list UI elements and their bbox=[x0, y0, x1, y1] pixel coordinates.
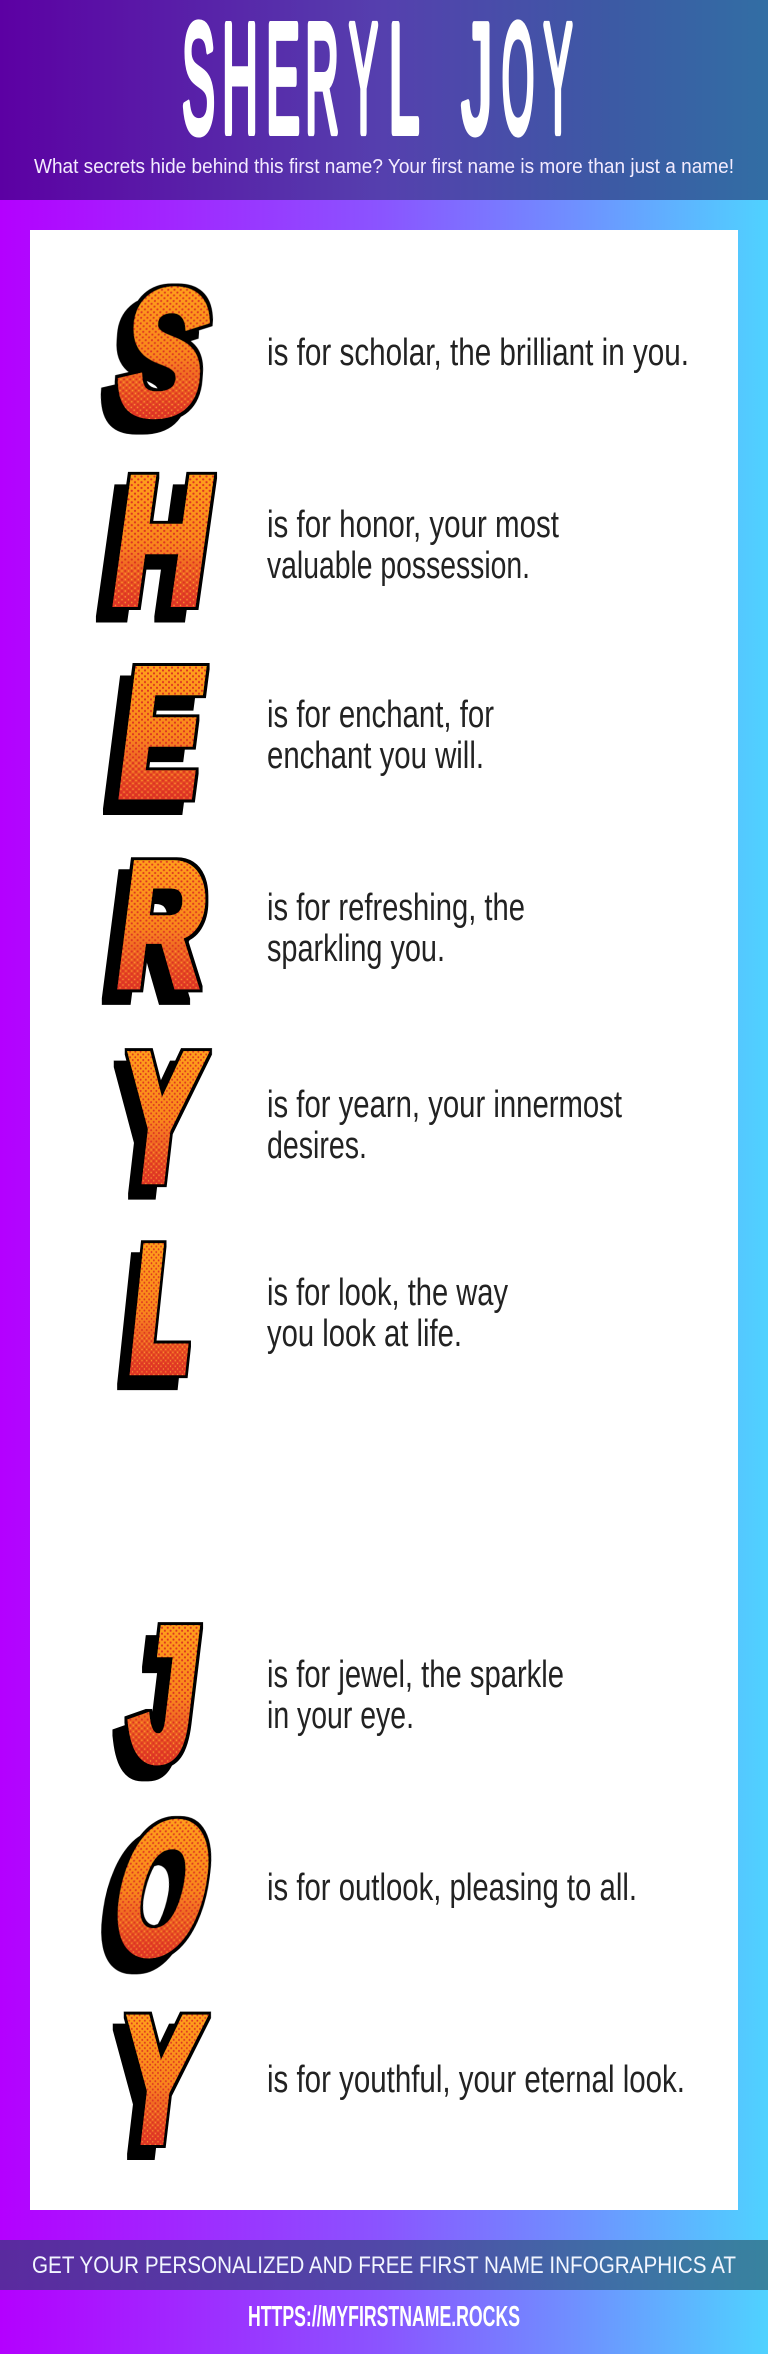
row: R bbox=[119, 826, 525, 1023]
row: H bbox=[114, 441, 559, 641]
row: Y second bbox=[123, 1984, 685, 2176]
text: jewel: is for jewel, the sparkle bbox=[267, 1654, 564, 1696]
icon: comic letter R: R bbox=[119, 826, 203, 1023]
header background bbox=[0, 0, 768, 200]
icon: comic letter O: O bbox=[104, 1786, 218, 1992]
text: yearn bbox=[267, 1084, 622, 1167]
text: enchant: is for enchant, for bbox=[267, 694, 494, 736]
row: O bbox=[104, 1786, 637, 1992]
row: Y bbox=[124, 1019, 622, 1216]
text: refreshing bbox=[267, 887, 525, 970]
icon: comic letter Y: Y bbox=[123, 1984, 201, 2176]
text: look: is for look, the way bbox=[267, 1272, 508, 1314]
text: honor: is for honor, your most bbox=[267, 504, 559, 546]
text: honor bbox=[267, 504, 559, 587]
text: look: you look at life. bbox=[267, 1313, 462, 1355]
text: jewel bbox=[267, 1654, 564, 1737]
icon: comic letter J: J bbox=[130, 1591, 196, 1798]
text: enchant bbox=[267, 694, 494, 777]
title: SHERYL JOY bbox=[182, 0, 573, 166]
text: enchant: enchant you will. bbox=[267, 735, 484, 777]
icon: comic letter E: E bbox=[120, 631, 204, 834]
text: refreshing: is for refreshing, the bbox=[267, 887, 525, 929]
text: refreshing: sparkling you. bbox=[267, 928, 445, 970]
icon: comic letter S: S bbox=[114, 256, 213, 451]
icon: comic letter H: H bbox=[114, 441, 210, 641]
row: S bbox=[114, 256, 689, 451]
text: outlook: is for outlook, pleasing to all. bbox=[267, 1867, 637, 1909]
row: J bbox=[130, 1591, 564, 1798]
icon: comic letter Y: Y bbox=[124, 1019, 202, 1216]
footer url: HTTPS://MYFIRSTNAME.ROCKS bbox=[248, 2301, 520, 2333]
icon: comic letter L: L bbox=[132, 1211, 190, 1406]
row: E bbox=[120, 631, 494, 834]
row: L bbox=[132, 1211, 508, 1406]
text: look bbox=[267, 1272, 508, 1355]
subtitle: What secrets hide behind this first name? Your first name is more than just a name! bbox=[34, 155, 734, 178]
footer band bbox=[0, 2240, 768, 2290]
header panel bbox=[0, 0, 768, 200]
text: jewel: in your eye. bbox=[267, 1695, 414, 1737]
text: yearn: desires. bbox=[267, 1125, 367, 1167]
footer band background bbox=[0, 2240, 768, 2290]
white content panel bbox=[30, 230, 738, 2210]
text: honor: valuable possession. bbox=[267, 545, 530, 587]
text: yearn: is for yearn, your innermost bbox=[267, 1084, 622, 1126]
